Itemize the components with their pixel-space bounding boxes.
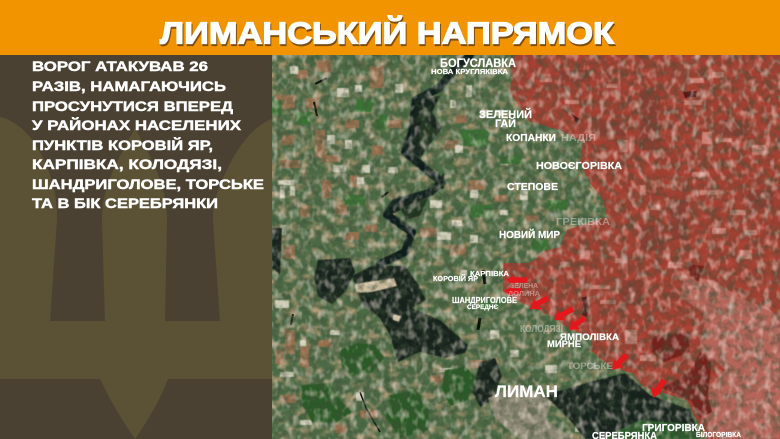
place labels: СТЕПОВЕ	[507, 182, 558, 193]
text block: attack summary: ВОРОГ АТАКУВАВ 26	[32, 58, 208, 74]
map: green woodland	[302, 343, 479, 438]
text block: attack summary: РАЗІВ, НАМАГАЮЧИСЬ	[32, 78, 226, 94]
arrow: Hryhorivka	[651, 380, 664, 398]
place labels: ГАЙ	[495, 117, 516, 130]
map: dark noise texture	[272, 55, 780, 439]
occupied darker fields	[560, 70, 774, 306]
text block: attack summary: КАРПІВКА, КОЛОДЯЗІ,	[32, 156, 222, 172]
place labels: ЛИМАН	[495, 382, 558, 401]
map: brown noise	[272, 55, 780, 439]
map: ponds and gullies	[291, 78, 485, 432]
text block: attack summary: ТА В БІК СЕРЕБРЯНКИ	[32, 195, 218, 211]
place labels: КОЛОДЯЗІ	[520, 324, 563, 335]
occupied territory overlay	[503, 55, 780, 439]
place labels: ГРИГОРІВКА	[642, 423, 705, 434]
place labels: СЕРЕДНЄ	[467, 304, 498, 311]
text block: attack summary: ШАНДРИГОЛОВЕ, ТОРСЬКЕ	[32, 176, 264, 192]
place labels: ЗЕЛЕНА	[510, 281, 539, 290]
map: sand patches	[355, 278, 401, 322]
occupied dark forest	[652, 264, 712, 418]
title: ЛИМАНСЬКИЙ НАПРЯМОК	[161, 16, 615, 52]
map: forests	[272, 228, 700, 439]
place labels	[431, 58, 741, 439]
occupied pale ground	[682, 275, 780, 439]
text block: attack summary	[32, 58, 264, 211]
arrow: Kolodiazi	[569, 318, 585, 330]
place labels: КОПАНКИ	[506, 133, 556, 144]
place labels: ЯМПОЛІВКА	[560, 332, 619, 343]
place labels: ЗЕЛЕНИЙ	[479, 108, 532, 121]
text block: attack summary: ПУНКТІВ КОРОВІЙ ЯР,	[32, 136, 213, 153]
place labels: ТОРСЬКЕ	[567, 361, 613, 372]
place labels: НОВОЄГОРІВКА	[536, 161, 622, 172]
arrow: Torske	[612, 355, 627, 370]
place labels: МИРНЕ	[547, 339, 581, 350]
text block: attack summary: У РАЙОНАХ НАСЕЛЕНИХ	[32, 116, 242, 133]
place labels: ГРЕКІВКА	[556, 217, 610, 228]
arrow: Zelena Dolyna	[504, 286, 522, 296]
satellite map	[272, 55, 780, 439]
place labels: ДОЛИНА	[508, 289, 541, 298]
place labels: НОВА КРУГЛЯКІВКА	[431, 67, 509, 76]
map: Liman city sand area	[488, 384, 575, 439]
place labels: ШАНДРИГОЛОВЕ	[452, 296, 518, 305]
place labels: КАРПІВКА	[470, 269, 510, 278]
red attack arrows	[504, 275, 664, 398]
place labels: КОРОВІЙ ЯР	[433, 274, 478, 283]
title: ЛИМАНСЬКИЙ НАПРЯМОК	[160, 14, 614, 50]
place labels: НОВИЙ МИР	[499, 228, 560, 241]
arrow: Serednie	[554, 309, 573, 320]
place labels: БОГУСЛАВКА	[440, 58, 516, 70]
occupied fields	[540, 72, 766, 361]
left panel with trident emblem	[0, 55, 272, 439]
map: reservoir	[380, 55, 470, 264]
arrow: Shandryholove	[530, 298, 548, 309]
place labels: БІЛОГОРІВКА	[696, 432, 741, 439]
place labels: НАДІЯ	[561, 133, 596, 144]
map: pale noise texture	[272, 55, 780, 439]
header banner	[0, 0, 780, 55]
map: farm fields	[272, 60, 589, 433]
text block: attack summary: ПРОСУНУТИСЯ ВПЕРЕД	[32, 98, 233, 114]
arrow: Karpivka	[506, 275, 527, 285]
